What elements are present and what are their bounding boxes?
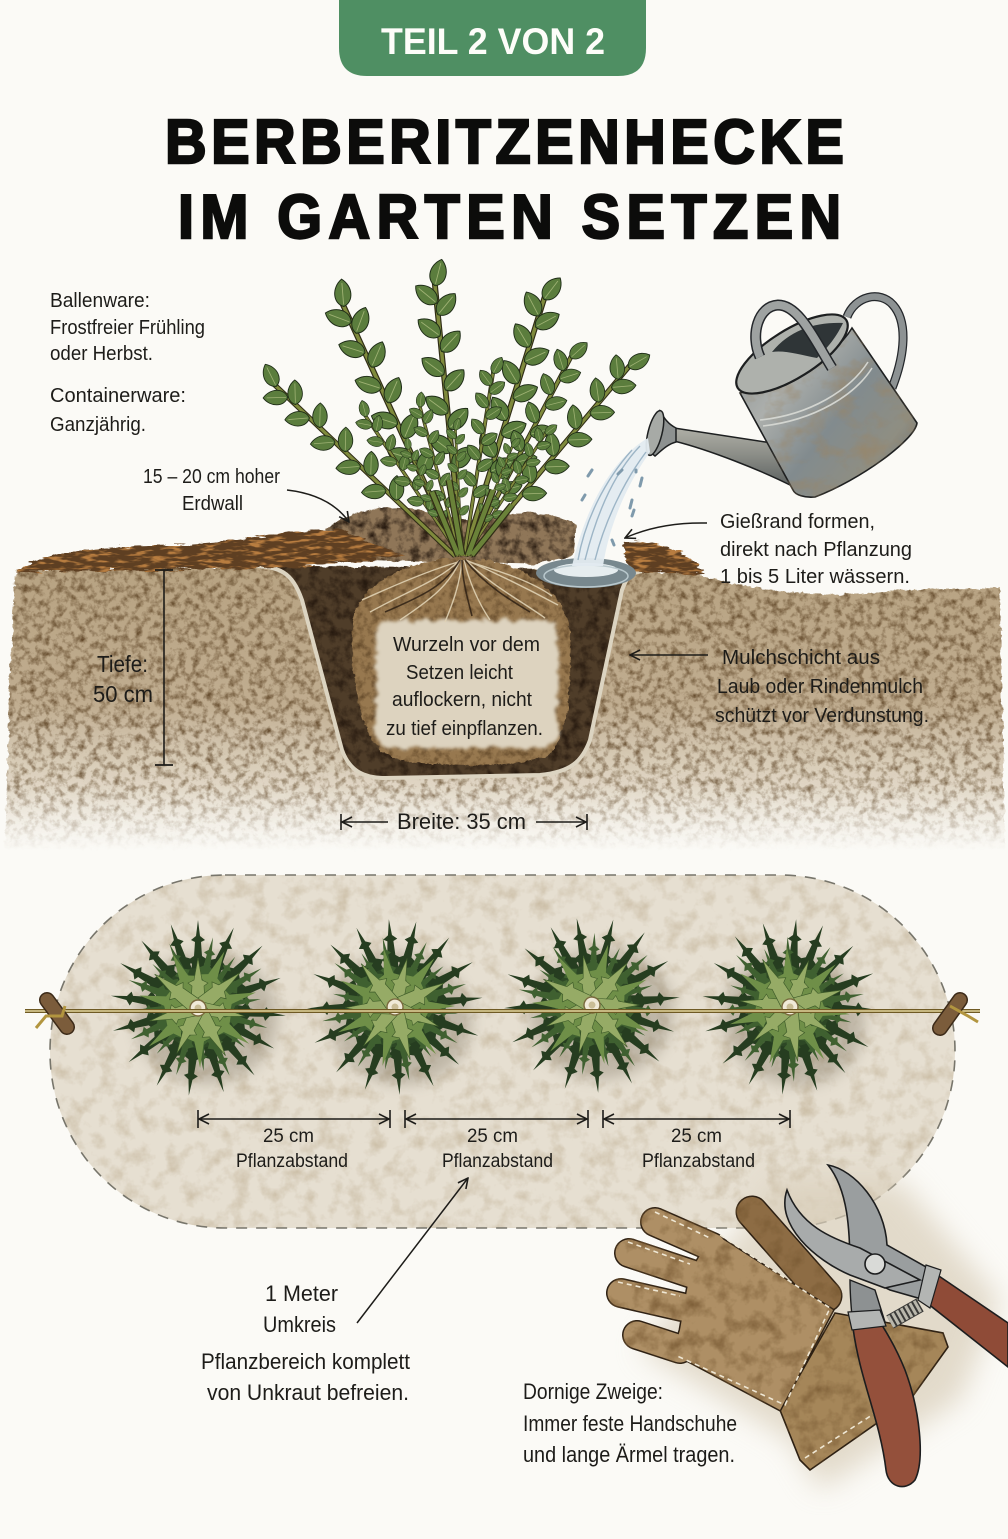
dimension: width xyxy=(341,809,587,834)
soil cross-section xyxy=(5,507,1005,850)
thumb xyxy=(752,1212,826,1296)
spacing dimensions: 25 cm xyxy=(671,1126,722,1147)
rose xyxy=(650,411,676,456)
rose face xyxy=(643,409,667,457)
text: root ball note: zu tief einpflanzen. xyxy=(386,718,543,740)
badge: Teil 2 von 2 xyxy=(339,0,646,76)
lower handle xyxy=(853,1322,920,1487)
lower guard xyxy=(848,1310,886,1330)
earth wall mound xyxy=(325,507,577,564)
planting bed xyxy=(50,875,955,1228)
text: root ball note xyxy=(386,634,543,740)
stitching xyxy=(618,1212,908,1458)
text: safety note: Immer feste Handschuhe xyxy=(523,1411,737,1436)
spacing dimensions: 25 cm xyxy=(263,1126,314,1147)
callout: mulch layer xyxy=(630,647,929,727)
spout xyxy=(674,428,798,485)
stake right xyxy=(940,1000,960,1028)
callout: one metre radius: Pflanzbereich komplett xyxy=(201,1349,410,1374)
planting string with stakes xyxy=(25,1000,980,1028)
text: root ball note: Wurzeln vor dem xyxy=(393,634,540,656)
text: planting seasons: Containerware: xyxy=(50,385,186,407)
text: planting seasons: Frostfreier Frühling xyxy=(50,317,205,339)
shrubs top view xyxy=(109,892,905,1122)
title: BERBERITZENHECKE xyxy=(165,107,844,176)
text: safety note xyxy=(523,1379,737,1467)
pruning shears xyxy=(785,1165,1008,1487)
cuff xyxy=(780,1313,948,1470)
text: planting seasons xyxy=(50,290,205,436)
mulch right xyxy=(622,541,705,574)
spacing dimensions: Pflanzabstand xyxy=(442,1151,553,1172)
badge: Teil 2 von 2: TEIL 2 VON 2 xyxy=(381,21,605,62)
water stream xyxy=(572,438,650,566)
callout: one metre radius: 1 Meter xyxy=(265,1281,338,1306)
top rim xyxy=(725,300,859,408)
stake left xyxy=(47,1000,67,1027)
watering can xyxy=(643,297,917,497)
spacing dimensions xyxy=(198,1110,790,1172)
body xyxy=(740,328,917,497)
pivot xyxy=(865,1254,885,1274)
plant xyxy=(242,255,663,573)
callout: earth wall: Erdwall xyxy=(182,493,243,515)
back handle xyxy=(847,297,903,388)
callout: watering edge: direkt nach Pflanzung xyxy=(720,539,912,561)
text: root ball note: auflockern, nicht xyxy=(392,689,532,711)
text: planting seasons: Ganzjährig. xyxy=(50,414,146,436)
gloves xyxy=(618,1180,1000,1490)
right handle xyxy=(927,1272,1008,1367)
callout: mulch layer: schützt vor Verdunstung. xyxy=(715,705,929,727)
dimension: depth: Tiefe: xyxy=(97,651,148,677)
mulch left xyxy=(15,529,405,572)
text: planting seasons: Ballenware: xyxy=(50,290,150,312)
callout: mulch layer: Laub oder Rindenmulch xyxy=(717,676,923,698)
bands xyxy=(760,362,872,426)
callout: watering edge xyxy=(625,511,912,588)
upper blade xyxy=(828,1165,935,1300)
ground xyxy=(5,567,1005,850)
callout: watering edge: 1 bis 5 Liter wässern. xyxy=(720,566,910,588)
string xyxy=(25,1009,980,1013)
text: planting seasons: oder Herbst. xyxy=(50,343,153,365)
hand xyxy=(621,1222,833,1410)
callout: one metre radius: Umkreis xyxy=(263,1312,336,1337)
opening xyxy=(772,323,843,358)
title: IM GARTEN SETZEN xyxy=(178,182,841,251)
spacing dimensions: Pflanzabstand xyxy=(236,1151,348,1172)
right guard xyxy=(918,1265,941,1308)
dimension: depth: 50 cm xyxy=(93,681,153,707)
text: safety note: und lange Ärmel tragen. xyxy=(523,1442,735,1467)
callout: one metre radius: von Unkraut befreien. xyxy=(207,1380,409,1405)
callout: mulch layer: Mulchschicht aus xyxy=(722,647,880,669)
lower arm xyxy=(850,1280,885,1328)
planting hole xyxy=(250,566,660,778)
hole outline xyxy=(250,566,660,778)
callout: watering edge: Gießrand formen, xyxy=(720,511,875,533)
text: safety note: Dornige Zweige: xyxy=(523,1379,663,1404)
dimension: depth xyxy=(93,570,164,765)
callout: earth wall: 15 – 20 cm hoher xyxy=(143,466,280,488)
water puddle xyxy=(536,558,636,588)
root ball xyxy=(353,558,570,765)
top handle xyxy=(756,305,832,368)
dimension: width: Breite: 35 cm xyxy=(397,809,526,834)
glove shadow xyxy=(640,1180,1000,1490)
stem base xyxy=(432,480,512,555)
text: root ball note: Setzen leicht xyxy=(406,662,513,684)
knots xyxy=(36,1006,978,1028)
lower blade xyxy=(785,1190,920,1288)
spacing dimensions: 25 cm xyxy=(467,1126,518,1147)
callout: one metre radius xyxy=(201,1178,468,1405)
bed outline xyxy=(50,875,955,1228)
title xyxy=(165,107,844,251)
callout: earth wall xyxy=(143,466,349,522)
spacing dimensions: Pflanzabstand xyxy=(642,1151,755,1172)
spring xyxy=(890,1305,920,1322)
